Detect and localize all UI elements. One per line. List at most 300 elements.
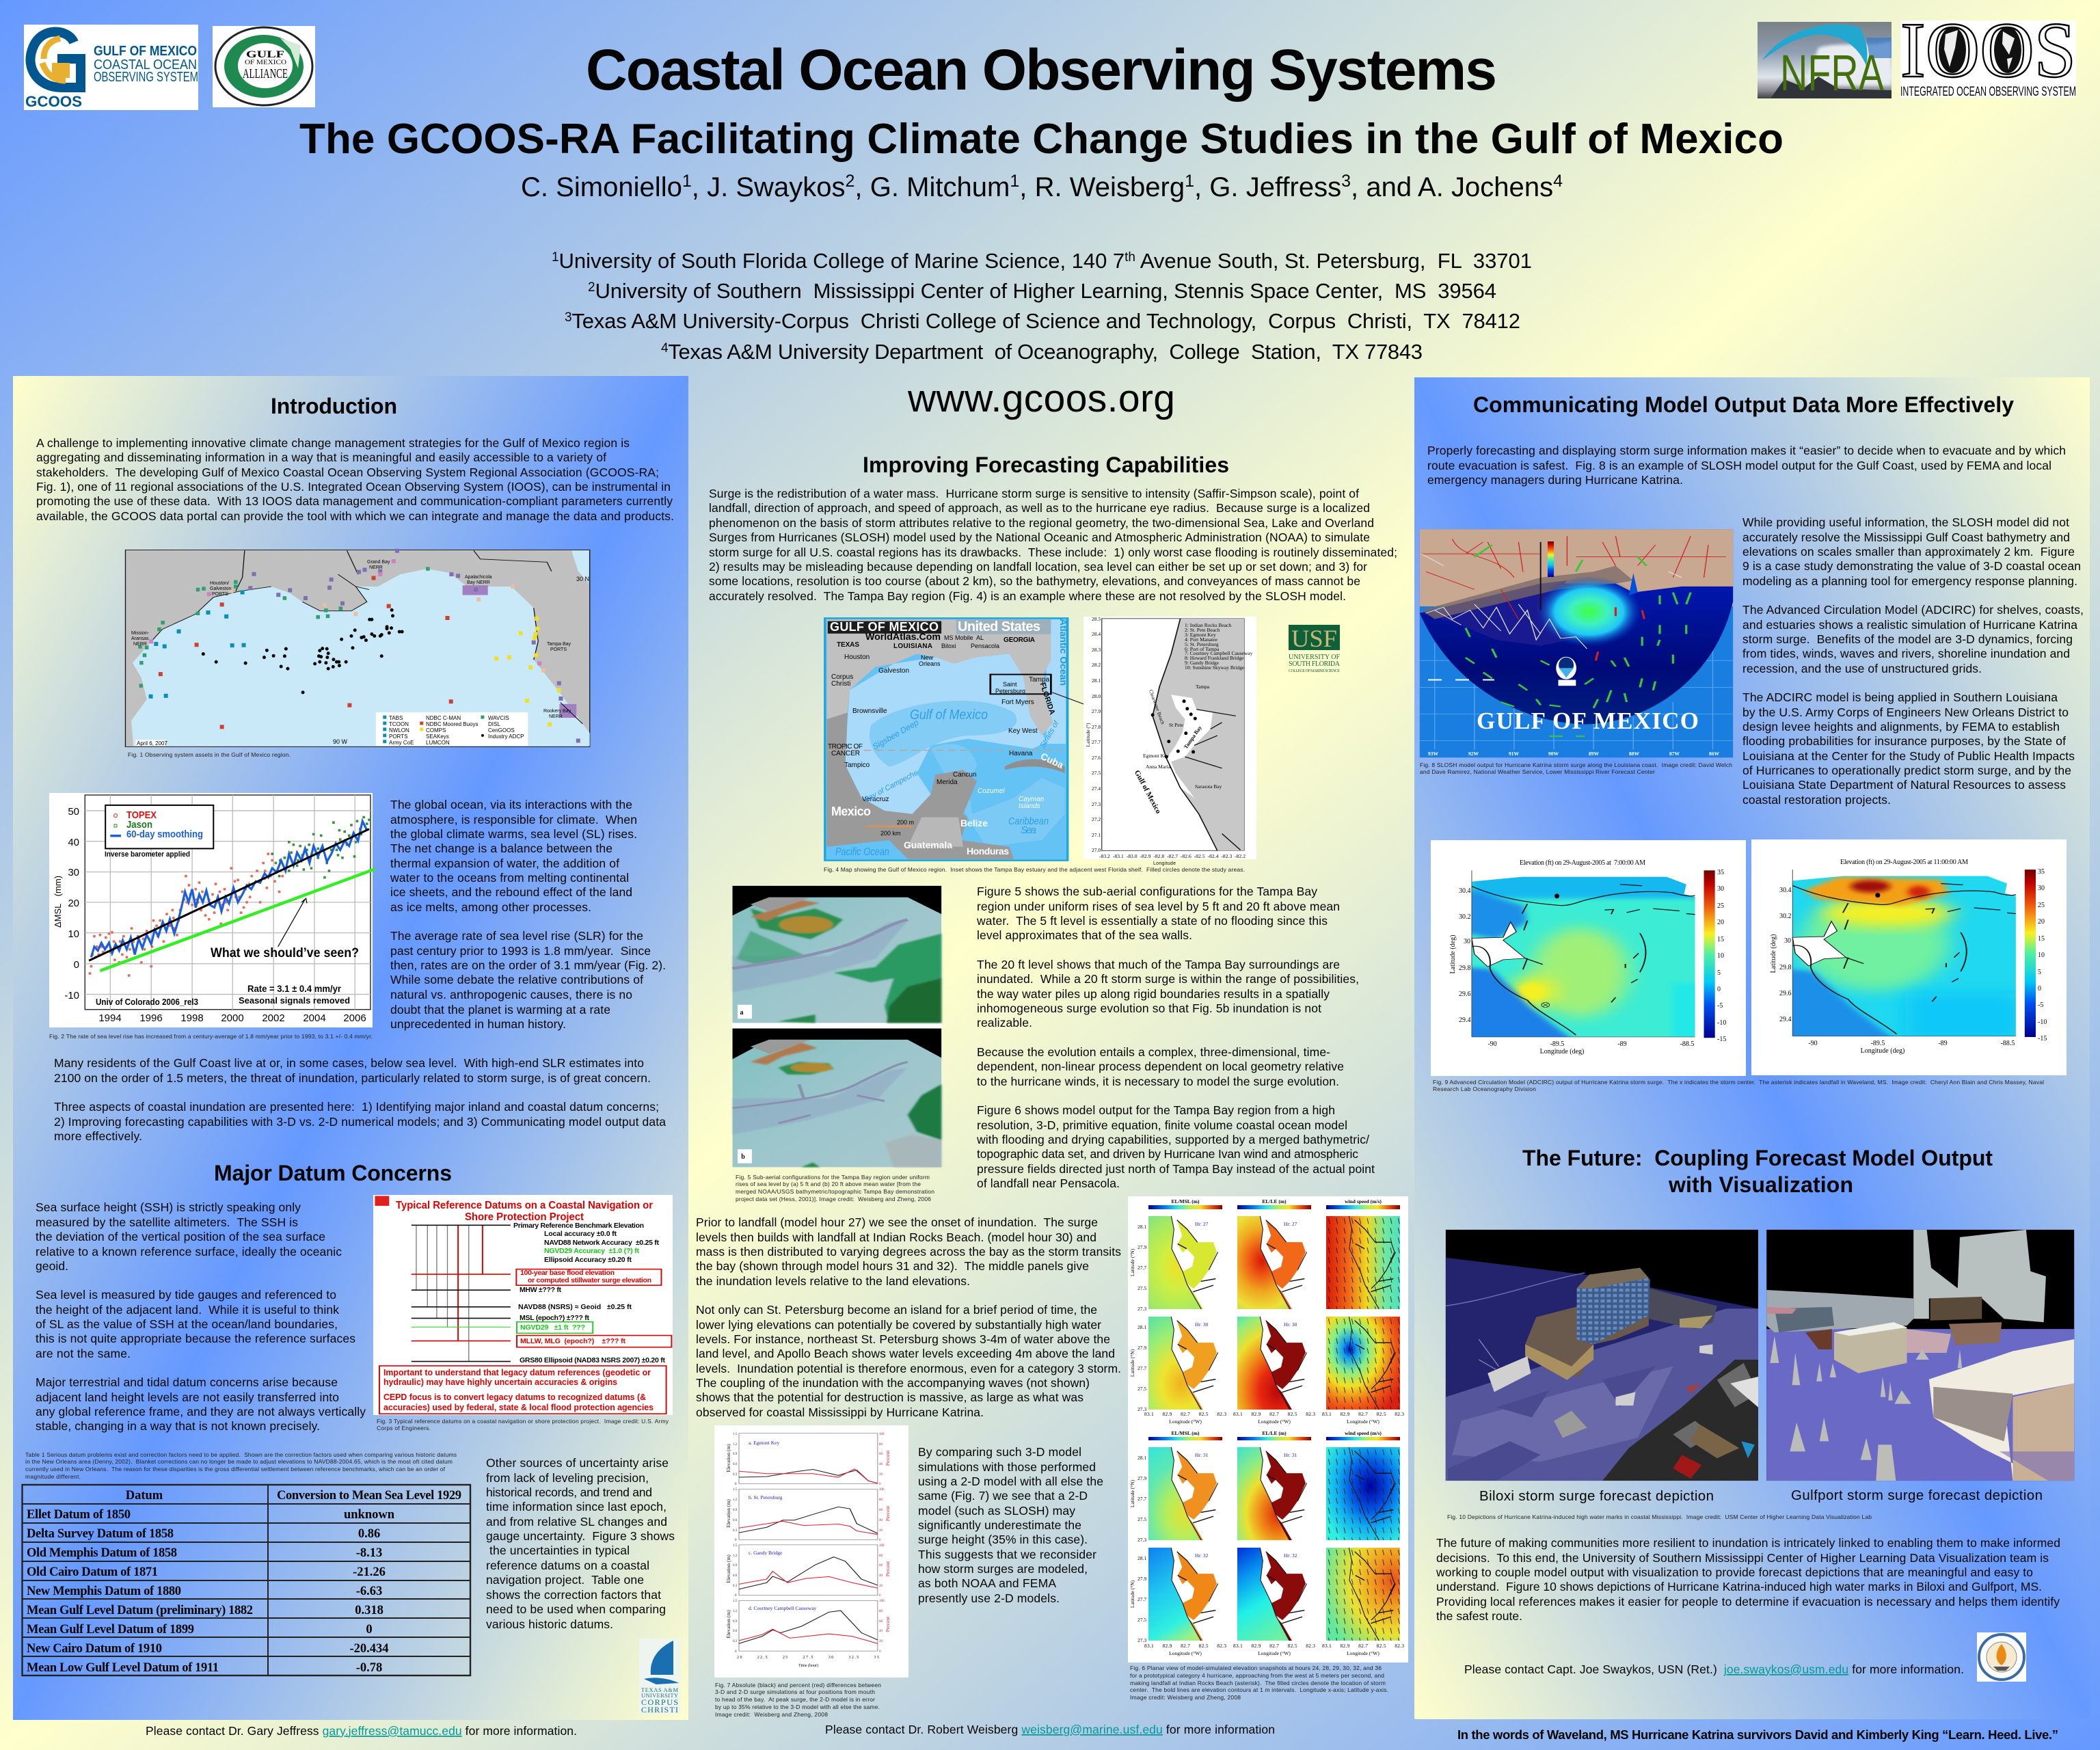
figure 3: reference datums diagram: CEPD focus is to convert legacy datums to recognized datums (&: [383, 1392, 646, 1402]
figure 4 inset: Tampa Bay map: Anna Maria: [1146, 764, 1171, 770]
figure 7: elevation difference charts: 0: [735, 1539, 737, 1542]
figure 4 inset: Tampa Bay map: 27.8: [1092, 724, 1101, 730]
caption: figure 10: Fig. 10 Depictions of Hurricane Katrina-induced high water marks in coastal Mississippi. Image credit: USM Center of Higher Learning Data Visualization Lab: [1447, 1513, 1872, 1520]
text block: comparing models: presently use 2-D models.: [918, 1591, 1060, 1605]
figure 1: observing system map: PORTS: [550, 647, 567, 652]
figure 6: model snapshots: Longitude (°W): [1258, 1650, 1291, 1656]
text block: SLOSH and ADCIRC: flooding probabilities for insurance purposes, by the State of: [1742, 734, 2066, 748]
figure 9: ADCIRC 11 AM: 29.6: [1779, 990, 1791, 997]
text block: landfall and inundation: mass is then distributed to varying degrees across the bay as the storm transits: [696, 1245, 1121, 1258]
logo: Texas A&M Corpus Christi: TEXAS A&M: [641, 1686, 678, 1693]
figure 9: ADCIRC 11 AM: Elevation (ft) on 29-August-2005 at 11:00:00 AM: [1840, 859, 1968, 866]
text block: storm surge: 2) results may be misleading because depending on landfall location, sea level can either be set up or set down; and 3) for: [709, 560, 1367, 574]
figure 7: elevation difference charts: Elevation (m): [725, 1610, 731, 1639]
logo: Center of Higher Learning: [1977, 1632, 2026, 1682]
text block: global ocean: The average rate of sea level rise (SLR) for the: [390, 929, 643, 943]
figure 4: Gulf of Mexico map: LOUISIANA: [893, 643, 932, 650]
logo: Texas A&M Corpus Christi: UNIVERSITY: [641, 1692, 678, 1699]
figure 4: Gulf of Mexico map: FLORIDA: [1038, 682, 1056, 716]
figure 4: Gulf of Mexico map: Petersburg: [995, 688, 1025, 695]
figure 9: ADCIRC 11 AM: 20: [2038, 918, 2045, 926]
figure 4: Gulf of Mexico map: CANCER: [831, 750, 860, 757]
figure 3: reference datums diagram: hydraulic) may have highly uncertain accuracies & origins: [383, 1377, 617, 1387]
figure 7: elevation difference charts: 0.3: [733, 1640, 738, 1643]
text block: sea surface height: Major terrestrial and tidal datum concerns arise because: [36, 1375, 338, 1389]
table: datum conversions: 0.86: [358, 1527, 380, 1541]
text block: global ocean: [390, 798, 666, 1031]
closing quote: In the words of Waveland, MS Hurricane Katrina survivors David and Kimberly King “Learn. Heed. Live.”: [1457, 1727, 2058, 1742]
logo: Texas A&M Corpus Christi: CORPUS: [641, 1697, 678, 1707]
text block: landfall and inundation: Prior to landfall (model hour 27) we see the onset of inundation. The surge: [696, 1215, 1098, 1229]
figure 4: Gulf of Mexico map: Orleans: [919, 660, 941, 667]
figure 6: model snapshots: Hr: 27: [1284, 1221, 1297, 1227]
figure 4 inset: Tampa Bay map: 6: Port of Tampa: [1185, 646, 1220, 652]
figure 7: elevation difference charts: d. Courtney Campbell Causeway: [749, 1605, 816, 1611]
figure 9: ADCIRC 11 AM: -15: [2038, 1035, 2047, 1042]
figure 8: SLOSH model output: 88W: [1629, 751, 1639, 757]
figure 4: Gulf of Mexico map: Islands: [1019, 803, 1040, 810]
affiliations: 1: [552, 250, 559, 265]
text block: storm surge: some locations, resolution is too course (about 2 km), so the bathymetry, elevations, and conveyances of mass cannot be: [709, 574, 1360, 588]
figure 9: ADCIRC 7 AM: 0: [1717, 986, 1721, 993]
figure 9: ADCIRC 11 AM: 10: [2038, 952, 2045, 959]
text block: comparing models: using a 2-D model with all else the: [918, 1475, 1103, 1488]
text block: landfall and inundation: [696, 1215, 1121, 1419]
figure 6: model snapshots: Longitude (°W): [1169, 1418, 1202, 1425]
figure 4 inset: Tampa Bay map: Gulf of Mexico: [1133, 769, 1163, 816]
figure 4: Gulf of Mexico map: Brownsville: [852, 708, 887, 715]
table: datum conversions: [22, 1485, 470, 1675]
figure 9: ADCIRC 7 AM: [1431, 840, 1746, 1076]
figure 4: Gulf of Mexico map: Merida: [937, 779, 958, 786]
text block: figures 5 and 6: [976, 885, 1375, 1190]
figure 7: elevation difference charts: 60: [879, 1453, 883, 1456]
caption: table 1: magnitude different.: [25, 1473, 81, 1480]
figure 7: elevation difference charts: 0: [735, 1483, 737, 1486]
figure 6: model snapshots: Latitude (°N): [1129, 1479, 1135, 1507]
figure 3: reference datums diagram: GRS80 Ellipsoid (NAD83 NSRS 2007) ±0.20 ft: [520, 1356, 666, 1364]
figure 7: elevation difference charts: 1.5: [733, 1544, 738, 1548]
figure 2: sea level rise chart: 2006: [343, 1012, 366, 1024]
text block: residents and inundation: 2) Improving forecasting capabilities with 3-D vs. 2-D numerical models; and 3) Communicating model output data: [54, 1115, 666, 1129]
text block: figures 5 and 6: realizable.: [977, 1016, 1032, 1029]
figure 4: Gulf of Mexico map: Pensacola: [971, 643, 999, 649]
text block: SLOSH and ADCIRC: coastal restoration projects.: [1742, 793, 1891, 807]
figure 8: SLOSH model output: 89W: [1589, 751, 1600, 757]
panel: communicating model output and the future: [1414, 377, 2090, 1719]
text block: global ocean: past century prior to 1993 is 1.8 mm/year. Since: [390, 944, 651, 958]
figure 9: ADCIRC 7 AM: 30.2: [1459, 913, 1471, 921]
figure 9: ADCIRC 11 AM: -10: [2038, 1019, 2047, 1026]
figure 1: observing system map: PORTS: [212, 592, 228, 597]
contact: Robert Weisberg: Please contact Dr. Robert Weisberg weisberg@marine.usf.edu for more information: [825, 1723, 1275, 1736]
figure 1: observing system map: Tampa Bay: [547, 642, 571, 647]
authors: , G. Mitchum: [854, 172, 1010, 202]
text block: other sources of uncertainty: navigation project. Table one: [486, 1573, 644, 1587]
figure 7: elevation difference charts: 0: [879, 1650, 881, 1654]
figure 9: ADCIRC 11 AM: Longitude (deg): [1861, 1047, 1904, 1055]
caption: figure 8: Fig. 8 SLOSH model output for Hurricane Katrina storm surge along the Louisiana coast. Image credit: David Welch: [1420, 762, 1732, 768]
figure 7: elevation difference charts: 0.6: [733, 1574, 738, 1578]
figure 1: observing system map: Galveston: [210, 587, 232, 591]
figure 6: model snapshots: wind speed (m/s): [1345, 1430, 1382, 1436]
figure 4: Gulf of Mexico map: Straits of: [1038, 719, 1061, 749]
caption: figure 2: Fig. 2 The rate of sea level rise has increased from a century-average of 1.8 mm/year prior to 1993, to 3.1 +/- 0.4 mm/yr.: [49, 1033, 373, 1040]
figure 4 inset: Tampa Bay map: 27.6: [1092, 755, 1101, 761]
text block: other sources of uncertainty: historical records, and trend and: [486, 1485, 652, 1499]
authors: 1: [1010, 172, 1019, 191]
figure 4: Gulf of Mexico map: New: [921, 654, 934, 661]
text block: comparing models: how storm surges are modeled,: [918, 1562, 1088, 1576]
figure 4: Gulf of Mexico map: Cozumel: [978, 788, 1005, 795]
text block: landfall and inundation: the bay (shown through model hours 31 and 32). The middle panels give: [696, 1259, 1089, 1273]
text block: other sources of uncertainty: various historic datums.: [486, 1617, 613, 1631]
figure 6: model snapshots: Latitude (°N): [1129, 1580, 1135, 1608]
figure 4 inset: Tampa Bay map: 27.9: [1092, 708, 1101, 714]
figure 6: model snapshots: 83.1 82.9 82.7 82.5 82.3: [1233, 1643, 1315, 1649]
figure 2: sea level rise chart: [49, 793, 375, 1027]
table: datum conversions: Conversion to Mean Sea Level 1929: [277, 1489, 461, 1503]
text block: SLOSH and ADCIRC: and estuaries shows a realistic simulation of Hurricane Katrina: [1742, 618, 2077, 632]
figure 7: elevation difference charts: 60: [879, 1564, 883, 1567]
figure 1: observing system map: April 6, 2007: [137, 740, 167, 746]
figure 4 inset: Tampa Bay map: 28.4: [1092, 631, 1101, 637]
figure 2: sea level rise chart: 0: [74, 959, 79, 971]
figure 6: model snapshots: 27.9: [1138, 1244, 1146, 1250]
caption: table 1: Table 1 Serious datum problems exist and correction factors need to be applied. Shown are the correction factors used when comparing various historic datums: [25, 1451, 457, 1458]
text block: figures 5 and 6: inundated. While a 20 ft storm surge is within the range of possibilities,: [977, 972, 1359, 986]
figure 2: sea level rise chart: Jason: [126, 819, 152, 831]
table: datum conversions: Old Memphis Datum of 1858: [27, 1546, 177, 1560]
text block: introduction: [36, 436, 674, 523]
figure 7: elevation difference charts: 0.9: [733, 1620, 738, 1624]
figure 9: ADCIRC 7 AM: 25: [1717, 902, 1724, 910]
figure 9: ADCIRC 11 AM: Latitude (deg): [1770, 934, 1777, 973]
text block: global ocean: The global ocean, via its interactions with the: [390, 798, 632, 811]
text block: sea surface height: of SL as the value of SSH at the ocean/land boundaries,: [36, 1317, 338, 1331]
figure 9: ADCIRC 7 AM: 15: [1717, 936, 1724, 943]
figure 6: model snapshots: wind speed (m/s): [1345, 1198, 1382, 1204]
figure 1: observing system map: Grand Bay: [367, 560, 390, 565]
label: Biloxi: Biloxi storm surge forecast depiction: [1479, 1488, 1714, 1504]
caption: figure 5: merged NOAA/USGS bathymetric/topographic Tampa Bay demonstration: [736, 1188, 934, 1195]
text block: the future: the safest route.: [1436, 1609, 1522, 1623]
text block: SLOSH and ADCIRC: elevations on scales smaller than approximately 2 km. Figure: [1742, 545, 2075, 558]
caption: figure 9: Research Lab Oceanography Division: [1433, 1086, 1536, 1092]
text block: SLOSH and ADCIRC: of Hurricanes to operationally predict storm surge, and by the: [1742, 764, 2071, 777]
caption: figure 6: center. The bold lines are elevation contours at 1 m intervals. Longitude x-axis; Latitude y-axis.: [1130, 1686, 1388, 1693]
figure 1: observing system map: PORTS: [389, 733, 407, 740]
text block: figures 5 and 6: resolution, 3-D, primitive equation, finite volume coastal ocean model: [977, 1118, 1347, 1132]
label: Gulfport: Gulfport storm surge forecast depiction: [1791, 1488, 2043, 1503]
text block: forecasting and displaying: route evacuation is safest. Fig. 8 is an example of SLOSH model output for the Gulf Coast, used by FEMA and local: [1427, 459, 2051, 472]
figure 4: Gulf of Mexico map: 200 km: [880, 830, 901, 837]
caption: table 1: currently used in New Orleans. The reason for these disparities is the gross differential settlement between reference benchmarks, which can be an order of: [25, 1466, 446, 1472]
text block: global ocean: thermal expansion of water, the addition of: [390, 857, 619, 870]
figure 4: Gulf of Mexico map: Honduras: [967, 846, 1009, 857]
text block: landfall and inundation: The coupling of the inundation with the accompanying waves (not shown): [696, 1376, 1090, 1390]
text block: global ocean: ice sheets, and the rebound effect of the land: [390, 885, 632, 899]
table: datum conversions: 0: [366, 1623, 373, 1637]
figure 4: Gulf of Mexico map: Christi: [831, 680, 850, 688]
figure 6: model snapshots: Hr: 32: [1195, 1552, 1209, 1559]
figure 4: Gulf of Mexico map: Veracruz: [862, 796, 889, 803]
affiliations: 2: [588, 280, 595, 295]
figure 7: elevation difference charts: 1.2: [733, 1498, 738, 1502]
text block: landfall and inundation: shows that the potential for destruction is massive, as large as what was: [696, 1390, 1083, 1404]
figure 4 inset: Tampa Bay map: 27.1: [1092, 832, 1101, 838]
figure 2: sea level rise chart: 1998: [180, 1012, 204, 1024]
affiliations: Texas A&M University-Corpus Christi College of Science and Technology, Corpus Christi, TX 78412: [571, 309, 1520, 333]
figure 7: elevation difference charts: 0.6: [733, 1630, 738, 1633]
figure 6: model snapshots: 83.1 82.9 82.7 82.5 82.3: [1233, 1411, 1315, 1417]
figure 4 inset: Tampa Bay map: Clearwater Beach: [1148, 688, 1166, 725]
figure 6: model snapshots: EL/LE (m): [1262, 1430, 1287, 1436]
figure 7: elevation difference charts: [714, 1425, 908, 1678]
text block: figures 5 and 6: of landfall near Pensacola.: [977, 1176, 1120, 1190]
figure 7: elevation difference charts: 60: [879, 1620, 883, 1624]
text block: global ocean: While some debate the relative contributions of: [390, 973, 643, 986]
text block: introduction: promoting the use of these data. With 13 IOOS data management and communication-compliant parameters currently: [36, 494, 673, 508]
figure 6: model snapshots: Longitude (°W): [1347, 1418, 1379, 1425]
text block: introduction: stakeholders. The developing Gulf of Mexico Coastal Ocean Observing System Regional Association (GCOOS-RA;: [36, 466, 659, 479]
figure 4: Gulf of Mexico map: [825, 618, 1138, 861]
figure 6: model snapshots: 27.7: [1138, 1496, 1146, 1502]
text block: other sources of uncertainty: reference datums on a coastal: [486, 1559, 649, 1572]
text block: SLOSH and ADCIRC: accurately resolve the Mississippi Gulf Coast bathymetry and: [1742, 530, 2070, 544]
figure 9: ADCIRC 7 AM: -15: [1717, 1036, 1726, 1043]
text block: residents and inundation: Three aspects of coastal inundation are presented here: 1) Identifying major inland and coastal datum concerns;: [54, 1100, 659, 1114]
text block: comparing models: model (such as SLOSH) may: [918, 1504, 1075, 1518]
text block: global ocean: The net change is a balance between the: [390, 842, 612, 855]
figure 4: Gulf of Mexico map: Havana: [1009, 750, 1033, 757]
table: datum conversions: -6.63: [356, 1585, 382, 1598]
figure 9: ADCIRC 7 AM: 35: [1717, 869, 1724, 876]
figure 1: observing system map: NERR: [369, 565, 383, 570]
logo: University of South Florida: [1289, 625, 1341, 673]
figure 10: Biloxi depiction: [1446, 1230, 1758, 1481]
caption: figure 5: project data set (Hess, 2001)]. Image credit: Weisberg and Zheng, 2006: [736, 1196, 931, 1202]
text block: other sources of uncertainty: [486, 1456, 675, 1631]
figure 9: ADCIRC 7 AM: -88.5: [1680, 1040, 1694, 1048]
text block: sea surface height: Sea level is measured by tide gauges and referenced to: [36, 1288, 336, 1302]
figure 7: elevation difference charts: 80: [879, 1498, 883, 1502]
text block: sea surface height: Sea surface height (SSH) is strictly speaking only: [36, 1200, 301, 1214]
figure 7: elevation difference charts: Elevation (m): [725, 1444, 731, 1472]
logo: IOOS: IOOS: [1900, 7, 2076, 94]
figure 1: observing system map: Rookery Bay: [543, 709, 571, 714]
caption: figure 5: Fig. 5 Sub-aerial configurations for the Tampa Bay region under uniform: [736, 1174, 930, 1181]
figure 1: observing system map: 30 N: [576, 576, 589, 582]
figure 4: Gulf of Mexico map: Biloxi: [941, 643, 956, 649]
figure 6: model snapshots: 27.9: [1138, 1576, 1146, 1582]
text block: forecasting and displaying: Properly forecasting and displaying storm surge information makes it “easier” to decide when to evacuate and by which: [1427, 444, 2066, 457]
authors: 1: [682, 172, 692, 191]
figure 6: model snapshots: [1128, 1196, 1408, 1662]
figure 1: observing system map: NERR: [133, 642, 147, 647]
figure 4: Gulf of Mexico map: GEORGIA: [1004, 636, 1035, 644]
figure 7: elevation difference charts: 0: [879, 1594, 881, 1598]
figure 9: ADCIRC 11 AM: 35: [2038, 868, 2045, 876]
text block: storm surge: phenomenon on the basis of storm attributes relative to the regional geometry, the two-dimensional Sea, Lake and Overland: [709, 516, 1374, 530]
figure 5: sub-aerial configurations: [733, 886, 941, 1167]
text block: introduction: Fig. 1), one of 11 regional associations of the U.S. Integrated Ocean Observing System (IOOS), can be instrumental in: [36, 480, 671, 494]
text block: landfall and inundation: levels. Inundation potential is therefore enormous, even for a category 3 storm.: [696, 1362, 1121, 1375]
figure 9: ADCIRC 7 AM: Latitude (deg): [1449, 935, 1457, 973]
figure 7: elevation difference charts: b. St. Petersburg: [749, 1494, 783, 1500]
text block: sea surface height: adjacent land height levels are not easily transferred into: [36, 1390, 339, 1404]
text block: the future: working to couple model output with visualization to provide forecast depictions that are meaningful and easy to: [1436, 1565, 2033, 1579]
caption: table 1: in the New Orleans area (Denny, 2002). Blanket corrections can no longer be made to adjust elevations to NAVD88-2004.65, which is the most oft cited datum: [25, 1458, 453, 1465]
figure 7: elevation difference charts: 40: [879, 1630, 883, 1633]
figure 6: model snapshots: 27.9: [1138, 1475, 1146, 1481]
heading: Communicating Model Output Data More Effectively: Communicating Model Output Data More Effectively: [1473, 392, 2014, 417]
subtitle: The GCOOS-RA Facilitating Climate Change Studies in the Gulf of Mexico: [299, 116, 1783, 163]
text block: introduction: A challenge to implementing innovative climate change management strategies for the Gulf of Mexico region is: [36, 436, 630, 450]
figure 2: sea level rise chart: 10: [68, 928, 79, 940]
authors: , R. Weisberg: [1019, 172, 1185, 202]
table: datum conversions: Mean Gulf Level Datum (preliminary) 1882: [27, 1604, 253, 1617]
figure 7: elevation difference charts: 40: [879, 1463, 883, 1466]
figure 6: model snapshots: Hr: 30: [1284, 1321, 1297, 1328]
figure 1: observing system map: NDBC C-MAN: [426, 715, 461, 721]
table: datum conversions: Ellet Datum of 1850: [27, 1508, 131, 1522]
text block: the future: understand. Figure 10 shows depictions of Hurricane Katrina-induced high water marks in Biloxi and Gulfport, MS.: [1436, 1580, 2042, 1593]
authors: , and A. Jochens: [1351, 172, 1553, 202]
logo: Gulf of Mexico Alliance: ALLIANCE: [243, 66, 288, 81]
text block: comparing models: same (Fig. 7) we see that a 2-D: [918, 1489, 1088, 1503]
text block: SLOSH and ADCIRC: by the U.S. Army Corps of Engineers New Orleans District to: [1742, 705, 2069, 719]
figure 7: elevation difference charts: 0: [879, 1483, 881, 1486]
text block: comparing models: This suggests that we reconsider: [918, 1548, 1096, 1561]
caption: figure 6: Fig. 6 Planar view of model-simulated elevation snapshots at hours 24, 28, 29, 30, 32, and 36: [1130, 1665, 1382, 1671]
text block: storm surge: [709, 487, 1397, 603]
figure 9: ADCIRC 11 AM: 29.4: [1779, 1016, 1791, 1023]
figure 8: SLOSH model output: 92W: [1468, 751, 1479, 757]
figure 9: ADCIRC 11 AM: 0: [2038, 985, 2041, 993]
figure 7: elevation difference charts: c. Gandy Bridge: [749, 1550, 783, 1556]
authors: 2: [846, 172, 854, 191]
figure 6: model snapshots: 27.3: [1138, 1306, 1146, 1312]
figure 2: sea level rise chart: 2000: [221, 1012, 244, 1024]
text block: global ocean: as ice melts, among other processes.: [390, 900, 591, 914]
affiliations: University of South Florida College of Marine Science, 140 7: [559, 249, 1125, 273]
text block: comparing models: significantly underestimate the: [918, 1518, 1081, 1532]
authors: 4: [1553, 172, 1563, 191]
affiliations: th: [1125, 250, 1135, 265]
figure 10: Gulfport depiction: [1766, 1230, 2074, 1481]
text block: other sources of uncertainty: Other sources of uncertainty arise: [486, 1456, 669, 1470]
text block: global ocean: the global climate warms, sea level (SL) rises.: [390, 827, 637, 841]
text block: forecasting and displaying: [1427, 444, 2066, 487]
text block: global ocean: natural vs. anthropogenic causes, there is no: [390, 988, 632, 1001]
logo: Gulf of Mexico Alliance: [213, 26, 315, 107]
figure 6: model snapshots: 27.7: [1138, 1365, 1146, 1371]
caption: figure 6: making landfall at Indian Rocks Beach (asterisk). The filled circles denote the location of storm: [1130, 1680, 1386, 1686]
figure 7: elevation difference charts: 80: [879, 1554, 883, 1558]
figure 1: observing system map: DISL: [488, 721, 500, 727]
figure 2: sea level rise chart: 1996: [139, 1012, 163, 1024]
figure 7: elevation difference charts: 0.3: [733, 1585, 738, 1588]
figure 4 inset: Tampa Bay map: 9: Gandy Bridge: [1185, 660, 1220, 666]
contact: Joe Swaykos: Please contact Capt. Joe Swaykos, USN (Ret.) joe.swaykos@usm.edu for more information.: [1464, 1662, 1964, 1676]
logo: GCOOS: COASTAL OCEAN: [94, 57, 197, 72]
figure 4: Gulf of Mexico map: Fort Myers: [1001, 699, 1034, 706]
figure 9: ADCIRC 11 AM: [1751, 839, 2067, 1075]
figure 4 inset: Tampa Bay map: 28.3: [1092, 647, 1101, 653]
text block: other sources of uncertainty: the uncertainties in typical: [489, 1544, 630, 1557]
figure 8: SLOSH model output: [1420, 529, 1733, 757]
figure 4 inset: Tampa Bay map: 27.2: [1092, 816, 1101, 822]
figure 7: elevation difference charts: 20: [879, 1585, 883, 1588]
figure 4: Gulf of Mexico map: Guatemala: [904, 839, 952, 850]
panel: introduction and major datum concerns: [13, 376, 688, 1720]
figure 9: ADCIRC 11 AM: 30.4: [1779, 887, 1791, 894]
figure 6: model snapshots: EL/MSL (m): [1171, 1430, 1200, 1436]
caption: figure 7: to head of the bay. At peak surge, the 2-D model is in error: [715, 1696, 875, 1703]
figure 6: model snapshots: 27.3: [1138, 1406, 1146, 1412]
text block: other sources of uncertainty: time information since last epoch,: [486, 1500, 667, 1513]
affiliations: 3: [565, 310, 572, 325]
figure 4: Gulf of Mexico map: Cuba: [1039, 751, 1066, 770]
figure 4 inset: Tampa Bay map: 27.7: [1092, 739, 1101, 745]
figure 4 inset: Tampa Bay map: Latitude (°): [1085, 723, 1091, 746]
figure 6: model snapshots: 28.1: [1138, 1455, 1146, 1461]
figure 7: elevation difference charts: 0.3: [733, 1473, 738, 1477]
figure 4 inset: Tampa Bay map: 27.4: [1092, 785, 1101, 792]
figure 4: Gulf of Mexico map: Sigsbee Deep: [871, 717, 920, 751]
figure 3: reference datums diagram: or computed stillwater surge elevation: [528, 1276, 651, 1284]
figure 1: observing system map: TABS: [389, 715, 403, 721]
figure 4 inset: Tampa Bay map: Tampa Bay: [1183, 725, 1203, 750]
authors: 3: [1341, 172, 1351, 191]
figure 4: Gulf of Mexico map: Pacific Ocean: [835, 846, 889, 858]
text block: sea surface height: [36, 1200, 366, 1433]
figure 2: sea level rise chart: Univ of Colorado 2006_rel3: [96, 997, 198, 1007]
logo: University of South Florida: SOUTH FLORIDA: [1289, 660, 1341, 668]
figure 3: reference datums diagram: Ellipsoid Accuracy ±0.20 ft: [544, 1256, 632, 1264]
logo: Texas A&M Corpus Christi: CHRISTI: [641, 1705, 678, 1714]
figure 8: SLOSH model output: 86W: [1709, 751, 1720, 757]
figure 2: sea level rise chart: 50: [68, 806, 79, 818]
figure 4 inset: Tampa Bay map: 28.1: [1092, 677, 1101, 684]
figure 9: ADCIRC 11 AM: -89: [1938, 1040, 1948, 1047]
text block: sea surface height: measured by the satellite altimeters. The SSH is: [36, 1215, 298, 1229]
figure 9: ADCIRC 7 AM: 29.4: [1459, 1017, 1471, 1024]
affiliations: Texas A&M University Department of Oceanography, College Station, TX 77843: [668, 340, 1423, 364]
figure 4 inset: Tampa Bay map: Longitude: [1153, 861, 1176, 866]
figure 4: Gulf of Mexico map: Key West: [1008, 727, 1038, 735]
figure 2: sea level rise chart: What we should’ve seen?: [211, 946, 359, 960]
text block: SLOSH and ADCIRC: While providing useful information, the SLOSH model did not: [1742, 515, 2069, 529]
figure 9: ADCIRC 7 AM: -10: [1717, 1019, 1726, 1027]
text block: figures 5 and 6: to the hurricane winds, it is necessary to model the surge evolution.: [977, 1075, 1339, 1088]
figure 3: reference datums diagram: MSL (epoch?) ±??? ft: [520, 1314, 589, 1322]
figure 6: model snapshots: Latitude (°N): [1129, 1248, 1135, 1276]
affiliations: Avenue South, St. Petersburg, FL 33701: [1135, 249, 1532, 273]
figure 7: elevation difference charts: 100: [879, 1488, 885, 1492]
figure 4: Gulf of Mexico map: Cayman: [1019, 796, 1045, 803]
figure 4: Gulf of Mexico map: MS Mobile AL: [944, 634, 984, 641]
figure 9: ADCIRC 11 AM: 30.2: [1779, 913, 1791, 920]
panel: improving forecasting capabilities: [696, 377, 1408, 1718]
figure 7: elevation difference charts: 100: [879, 1600, 885, 1603]
figure 7: elevation difference charts: 0: [735, 1650, 737, 1654]
affiliations: University of Southern Mississippi Center of Higher Learning, Stennis Space Center, MS 39564: [595, 279, 1496, 303]
title: Coastal Ocean Observing Systems: [586, 38, 1497, 102]
figure 9: ADCIRC 7 AM: 10: [1717, 952, 1724, 960]
figure 4: Gulf of Mexico map: Bay of Campeche: [863, 769, 919, 804]
